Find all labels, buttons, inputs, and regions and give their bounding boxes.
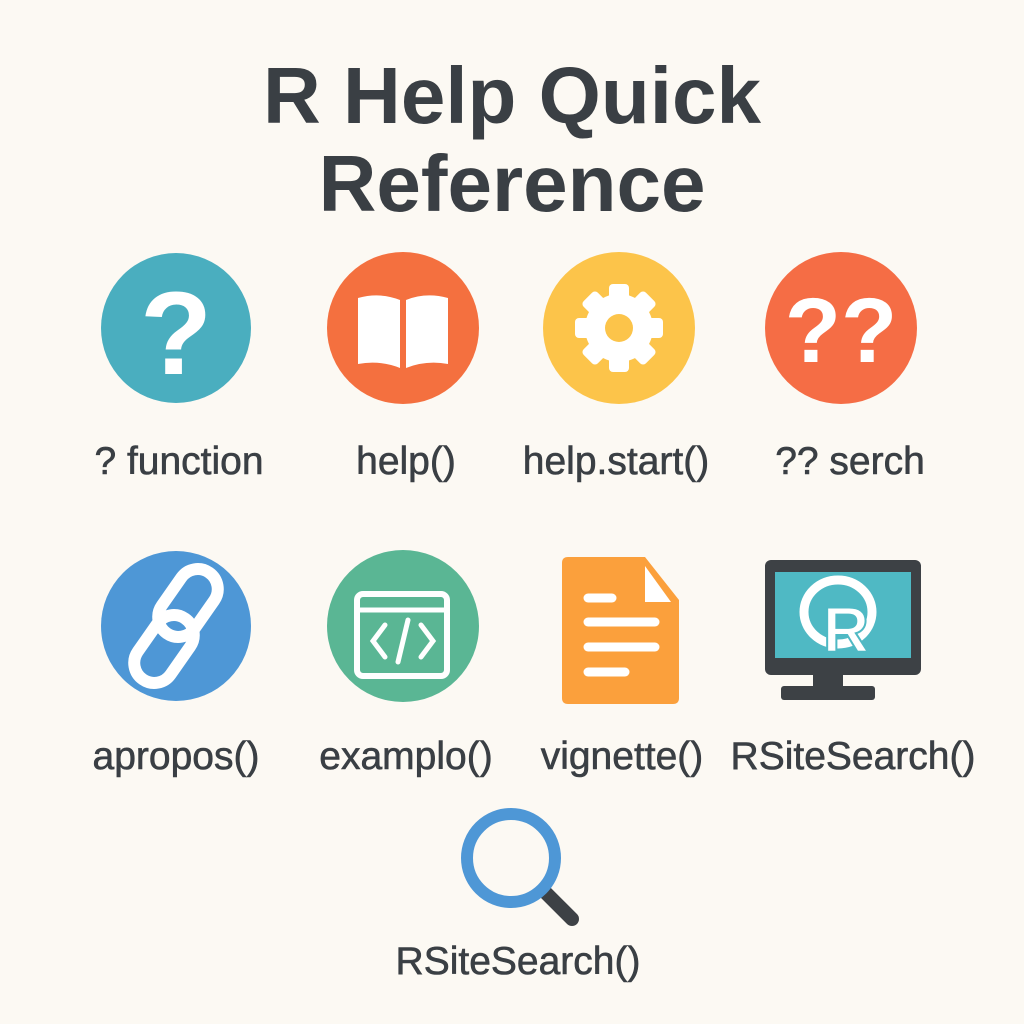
label: vignette(): vignette() bbox=[541, 735, 703, 778]
icon: question mark: ? bbox=[140, 268, 212, 400]
label: apropos(): apropos() bbox=[93, 735, 259, 778]
label: ? function: ? function bbox=[94, 440, 264, 483]
title bbox=[263, 51, 761, 228]
icon: book bbox=[327, 252, 479, 404]
icon: monitor with R bbox=[765, 560, 921, 700]
title: Reference bbox=[319, 139, 705, 228]
icon: magnifier bbox=[467, 814, 572, 919]
label: RSiteSearch() bottom: RSiteSearch() bbox=[396, 940, 640, 983]
title: R Help Quick bbox=[263, 51, 761, 140]
icon: code window bbox=[327, 550, 479, 702]
icon: double question: ?? bbox=[785, 280, 897, 382]
icon: gear bbox=[543, 252, 695, 404]
icon: document bbox=[562, 557, 679, 704]
label: help.start(): help.start() bbox=[523, 440, 709, 483]
label: ?? serch: ?? serch bbox=[775, 440, 925, 483]
icon: question mark bbox=[101, 253, 251, 403]
label: examplo(): examplo() bbox=[319, 735, 493, 778]
icon: chain link bbox=[101, 551, 251, 701]
label: help(): help() bbox=[356, 440, 456, 483]
icon: monitor with R: R bbox=[823, 594, 869, 666]
label: RSiteSearch(): RSiteSearch() bbox=[731, 735, 975, 778]
icon: double question bbox=[765, 252, 917, 404]
